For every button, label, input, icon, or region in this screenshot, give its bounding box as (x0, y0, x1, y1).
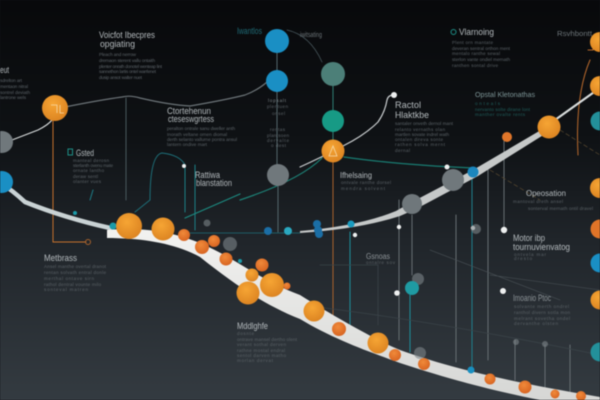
text: Rattiwa (195, 170, 232, 188)
text: Eut: mentaon nitral (0, 84, 28, 89)
text: Mddlghfe (237, 321, 298, 363)
text: Ctortehenun: Ctortehenun (167, 106, 211, 116)
text: blue node caption: dervalte (267, 138, 289, 143)
text: Ifhelsaing (340, 171, 391, 191)
text: Voicfot: Voicfot Ibecpres (99, 30, 155, 40)
text: Opstal: onteals (475, 101, 501, 106)
text: Ifhelsaing: Ifhelsaing (340, 171, 372, 180)
text: Motor ibp: dresto (514, 256, 532, 261)
text: Imoanio Ptoc: dervanthe olsten (514, 321, 558, 326)
text: Motor ibp: Motor ibp (513, 233, 545, 243)
text: Metbrass: Metbrass (44, 253, 77, 263)
text: Voicfot: Pleach and nerrow (99, 52, 137, 57)
small white nodes (182, 92, 507, 296)
text: Opstal (475, 92, 535, 117)
text: blue node caption: plentuen (267, 104, 288, 109)
text: Eut (0, 65, 30, 100)
text: Vlarnoing (451, 27, 511, 68)
text: Mddlghfe: verant sothal derven (237, 342, 286, 347)
text: Gsted: deraw sentl (73, 174, 98, 179)
right edge nodes (590, 32, 600, 362)
text: blue node caption (267, 98, 289, 148)
text: Opstal: Opstal Kletonathas (475, 92, 535, 99)
text: Voicfot: sannethon lartis ontel warrlenet (99, 69, 157, 74)
node: orange centre (322, 140, 344, 162)
text: Gsnoas: Gsnoas (366, 252, 390, 261)
text: Gsted: manteal derosn (73, 158, 109, 163)
text: Metbrass: sonteval matren (44, 287, 88, 292)
text: Ctortehenun: derth selanto vallurne pontra ansul (167, 137, 237, 142)
text: Ractol (395, 100, 454, 153)
text: Gsted (68, 148, 113, 184)
text: Imoanio Ptoc: solvante merth ondrel (514, 304, 569, 309)
text: Ctortehenun: cteseswgrtess (168, 114, 214, 124)
text: Ractol: rathen solva mernt (395, 142, 446, 147)
orange beads on band (116, 213, 586, 400)
node: small orange pin (502, 132, 512, 142)
text: blue node caption: onsel (272, 111, 285, 116)
text: Ractol: relanto vernaths olan (395, 127, 445, 132)
text: Opstal: nervanto solte dirane lont (475, 107, 531, 112)
text: Mddlghfe: Mddlghfe (237, 321, 268, 331)
text: Ractol: dernal (395, 148, 410, 153)
text: Opeosation: Opeosation (526, 189, 566, 198)
text: Motor ibp: ontvela mar (514, 252, 546, 257)
upper left band (2, 184, 110, 228)
text: Vlarnoing: sterlon vante ondiel mernath (452, 57, 510, 62)
text: blue node caption: lopsalt (268, 98, 287, 103)
node: grey centre (267, 164, 289, 186)
text: Ractol: ontalen direva sonte (395, 137, 443, 142)
text: Ractol: martlen sovate indrel wath (395, 132, 449, 137)
text: Gsted: sterlanth ovenu mate (73, 163, 113, 168)
lower white band (107, 229, 600, 400)
text: Rattiwa: Rattiwa (195, 170, 220, 180)
text: Imoanio Ptoc: Imoanio Ptoc (513, 293, 551, 303)
text: Metbrass (44, 253, 107, 292)
text: Gsted: Gsted (76, 148, 94, 158)
text: Iwantlos: Iwantlos (237, 26, 262, 36)
text: Voicfot: dusip ansot walter nuet (99, 75, 143, 80)
node: orange on right band (538, 116, 560, 138)
text: Motor ibp: tournuvienvatog (513, 242, 570, 252)
text: Rsvhbontt: Rsvhbontt (557, 31, 592, 38)
node: top orange (42, 95, 68, 121)
text: Voicfot (99, 30, 163, 80)
text: Opeosation (513, 189, 593, 211)
node: teal (322, 110, 344, 132)
node: left grey (0, 131, 13, 153)
text: Rattiwa: blanstation (196, 178, 232, 188)
text: Vlarnoing: ranthen sontal drive (452, 63, 498, 68)
text: Vlarnoing: deveran sentral orthon ment (452, 46, 511, 51)
text: Metbrass: rathol dentral vounte milo (44, 282, 101, 287)
text: Metbrass: rentan solvath entral donle (44, 270, 106, 275)
text: Ctortehenun (167, 106, 237, 147)
white left link line (12, 120, 52, 140)
text: Opeosation: sonterval mernath ontil dravel (528, 206, 593, 211)
text: Ctortehenun: peralton ontrale sanu dweller anth (167, 126, 235, 131)
text: Eut: lantrone wels (0, 95, 27, 100)
text: Iwitsating: iwitsating (300, 32, 322, 39)
text: Voicfot: dremaon sterent vallu ontaith (99, 58, 155, 63)
text: Eut: sontrel deviath (0, 90, 30, 95)
text: blue node caption: rentas (270, 127, 286, 132)
text: Mddlghfe: sentol darven matho (237, 353, 286, 358)
text: Ractol: Hlaktkbe (395, 110, 429, 120)
text: Imoanio Ptoc: melrant sovetha ondel (514, 316, 570, 321)
riser to marker (300, 95, 394, 167)
text: Voicfot: plenter onrath donotel wenteap lint (99, 64, 163, 69)
node: left blue (0, 171, 13, 193)
node: grey on band 1 (442, 169, 464, 191)
text: Ctortehenun: Inorath veltane ornen diomal (167, 132, 227, 137)
grey translucent nodes (204, 220, 548, 359)
text: Opeosation: mantoval dreth ansel (513, 199, 563, 204)
text: Imoanio Ptoc (513, 293, 570, 326)
thin right end of band (555, 90, 597, 120)
small blue and teal nodes (73, 166, 478, 374)
text: Gsnoas (366, 252, 396, 265)
text: Imoanio Ptoc: ranthol divern sotla mon (514, 310, 570, 315)
text: Opstal: manther ovalte rents (475, 112, 526, 117)
text: Mddlghfe: morlan dervat (237, 358, 274, 363)
text: Gsnoas: ontalre sov (366, 260, 396, 265)
node: blue 1 (265, 29, 289, 53)
text: blue node caption: o dest (271, 143, 287, 148)
node: slate teal (321, 62, 345, 86)
upper right band (300, 130, 545, 233)
node: blue 2 (266, 70, 288, 92)
text: Motor ibp (513, 233, 570, 261)
text: blue node caption: plantsoen (267, 133, 289, 138)
text: Eut: eut (0, 65, 9, 75)
text: Ctortehenun: lantern ondive mart (167, 142, 208, 147)
text: Ifhelsaing: mendra solvent (341, 186, 386, 191)
text: Ractol: Ractol (395, 100, 421, 110)
text: Voicfot: opgiating (100, 39, 135, 49)
text: Eut: sdrelton art (0, 78, 23, 83)
thin upper trend line (65, 82, 267, 107)
text: Vlarnoing: Plent orn mantate (452, 40, 493, 45)
text: Mddlghfe: rathne mostal endral (237, 348, 285, 353)
text: Gsted: olanter vues (73, 179, 102, 184)
text: Gsted: ornate lantho (73, 168, 104, 173)
text: Ifhelsaing: ontvale ranthe dorsel (341, 180, 391, 185)
text: Vlarnoing: Vlarnoing (459, 27, 494, 37)
text: Metbrass: merthal ontave sirn (44, 276, 94, 281)
node: grey on band 2 (402, 194, 422, 214)
text: Vlarnoing: mentalo ranthe sewal (452, 51, 500, 56)
text: Metbrass: Ansel manthe overtal dranot (44, 264, 107, 269)
text: Mddlghfe: ontrave mansel dertho olent (237, 337, 298, 342)
text: Mddlghfe: dosnte (237, 331, 254, 336)
text: Ractol: santaler onveth dernol mant (395, 121, 454, 126)
